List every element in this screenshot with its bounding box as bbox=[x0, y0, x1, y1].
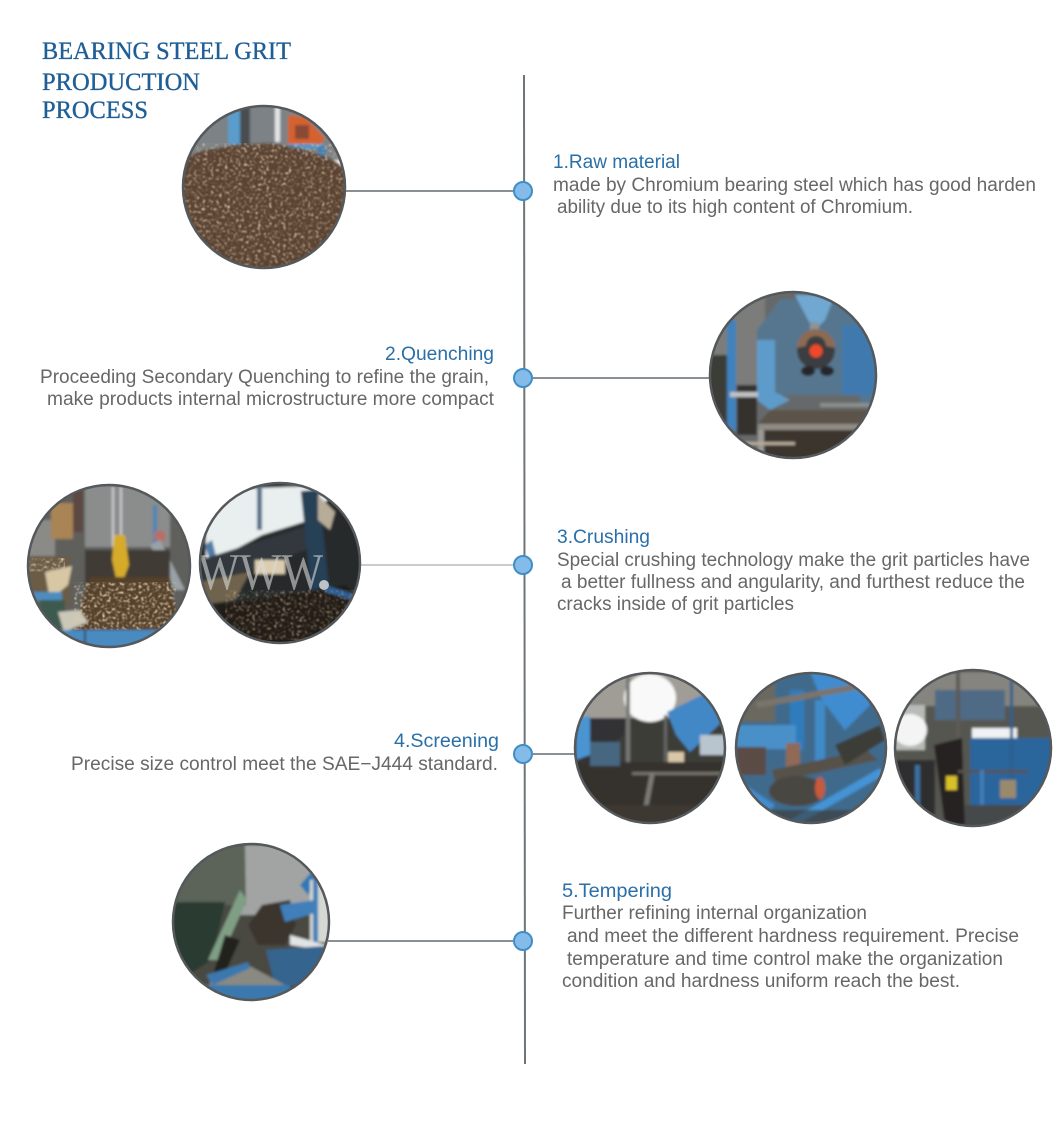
step 1 text bbox=[553, 152, 1036, 218]
step 2 text: 2.Quenching bbox=[385, 344, 494, 365]
connector: step 3 bbox=[360, 564, 515, 566]
photo: raw material grit pile bbox=[180, 100, 350, 270]
title: PROCESS bbox=[42, 97, 148, 124]
step 2 text: Proceeding Secondary Quenching to refine the grain, bbox=[40, 367, 489, 388]
step 4 text bbox=[71, 731, 499, 775]
step 1 text: made by Chromium bearing steel which has good harden bbox=[553, 175, 1036, 196]
step 5 text: temperature and time control make the organization bbox=[567, 949, 1003, 970]
photo: crushing hopper with watermark bbox=[195, 480, 365, 650]
photo: crushing station with crane bbox=[25, 480, 195, 655]
step 3 text: cracks inside of grit particles bbox=[557, 594, 794, 615]
connector: step 4 bbox=[533, 753, 576, 755]
timeline spine bbox=[524, 75, 525, 1064]
step 5 text: and meet the different hardness requirement. Precise bbox=[567, 926, 1019, 947]
photo: tempering furnace bbox=[170, 840, 335, 1005]
timeline node 2 bbox=[514, 369, 532, 387]
photo: quenching furnace bbox=[708, 290, 878, 460]
timeline node 5 bbox=[514, 932, 532, 950]
photo: screening tower bbox=[570, 670, 730, 830]
connector: step 5 bbox=[328, 940, 515, 942]
photo: screening conveyor bbox=[734, 672, 888, 824]
step 3 text bbox=[557, 527, 1030, 615]
step 5 text: 5.Tempering bbox=[562, 881, 672, 902]
step 5 text: condition and hardness uniform reach the best. bbox=[562, 971, 960, 992]
step 3 text: Special crushing technology make the grit particles have bbox=[557, 550, 1030, 571]
step 5 text bbox=[562, 881, 1019, 992]
step 1 text: ability due to its high content of Chromium. bbox=[557, 197, 913, 218]
connector: step 2 bbox=[533, 377, 711, 379]
step 4 text: Precise size control meet the SAE−J444 standard. bbox=[71, 754, 498, 775]
step 3 text: 3.Crushing bbox=[557, 527, 650, 548]
timeline node 3 bbox=[514, 556, 532, 574]
step 1 text: 1.Raw material bbox=[553, 152, 680, 173]
photo: screening forklift bbox=[894, 668, 1052, 828]
watermark: WWW bbox=[198, 544, 323, 601]
timeline node 4 bbox=[514, 745, 532, 763]
step 4 text: 4.Screening bbox=[394, 731, 499, 752]
connector: step 1 bbox=[345, 190, 515, 192]
timeline node 1 bbox=[514, 182, 532, 200]
step 3 text: a better fullness and angularity, and furthest reduce the bbox=[561, 572, 1025, 593]
step 2 text bbox=[40, 344, 495, 410]
step 5 text: Further refining internal organization bbox=[562, 903, 867, 924]
title: BEARING STEEL GRIT bbox=[42, 38, 291, 65]
title: PRODUCTION bbox=[42, 69, 200, 96]
title bbox=[42, 38, 291, 124]
step 2 text: make products internal microstructure more compact bbox=[47, 389, 495, 410]
